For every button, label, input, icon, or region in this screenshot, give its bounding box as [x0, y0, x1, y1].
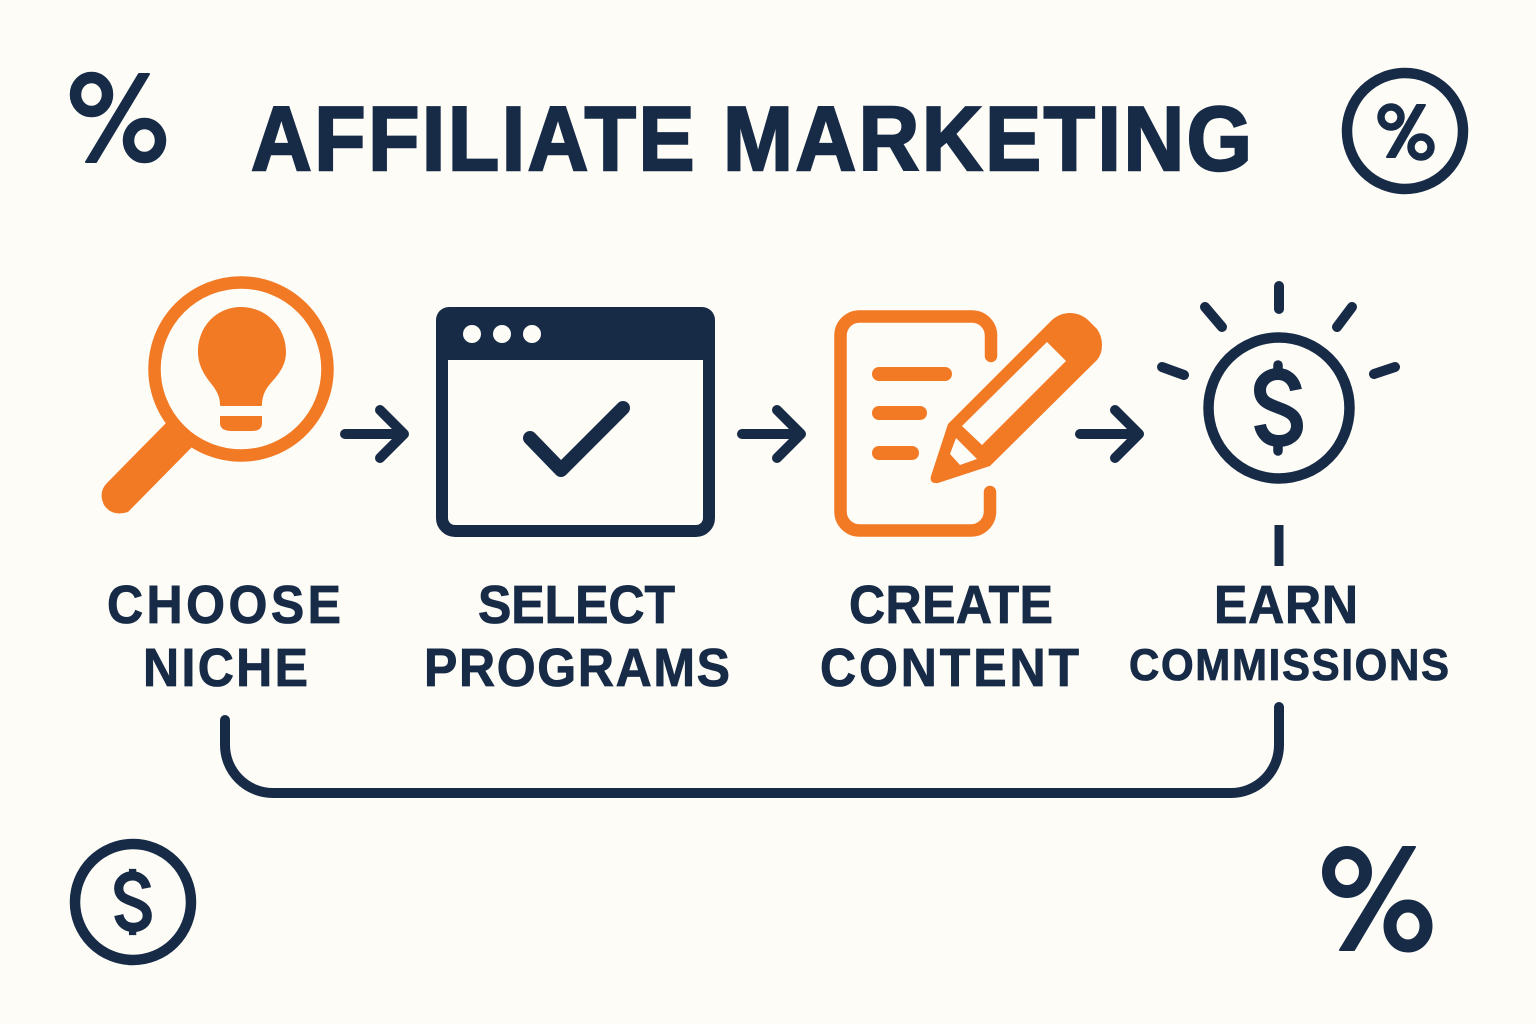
title: AFFILIATE MARKETING — [251, 88, 1252, 190]
arrow 3 — [1080, 410, 1139, 458]
label: select programs: PROGRAMS — [424, 637, 730, 697]
label: choose niche: CHOOSE — [107, 574, 341, 634]
arrow 1 — [345, 410, 404, 458]
icon: percent badge top right — [1347, 73, 1463, 189]
icon: browser window with check — [436, 307, 715, 531]
label: create content: CONTENT — [820, 637, 1079, 697]
label: choose niche — [107, 574, 341, 697]
feedback loop bracket — [225, 707, 1279, 793]
label: select programs — [424, 574, 730, 697]
icon: light bulb — [198, 307, 286, 431]
icon: dollar badge bottom left — [75, 844, 191, 960]
label: create content — [820, 574, 1079, 697]
icon: percent top left — [76, 74, 160, 162]
icon: pencil — [931, 313, 1102, 483]
label: select programs: SELECT — [478, 574, 675, 634]
label: choose niche: NICHE — [143, 637, 308, 697]
icon: dollar sign — [1260, 365, 1297, 451]
icon: percent bottom right — [1328, 847, 1426, 950]
icon: magnifier with light bulb — [102, 282, 327, 513]
label: earn commissions — [1129, 574, 1449, 690]
icon: dollar coin with rays — [1162, 286, 1395, 566]
label: create content: CREATE — [849, 574, 1053, 634]
arrow 2 — [742, 410, 801, 458]
label: earn commissions: EARN — [1214, 574, 1358, 634]
icon: document with pencil — [840, 313, 1102, 530]
label: earn commissions: COMMISSIONS — [1129, 641, 1449, 690]
